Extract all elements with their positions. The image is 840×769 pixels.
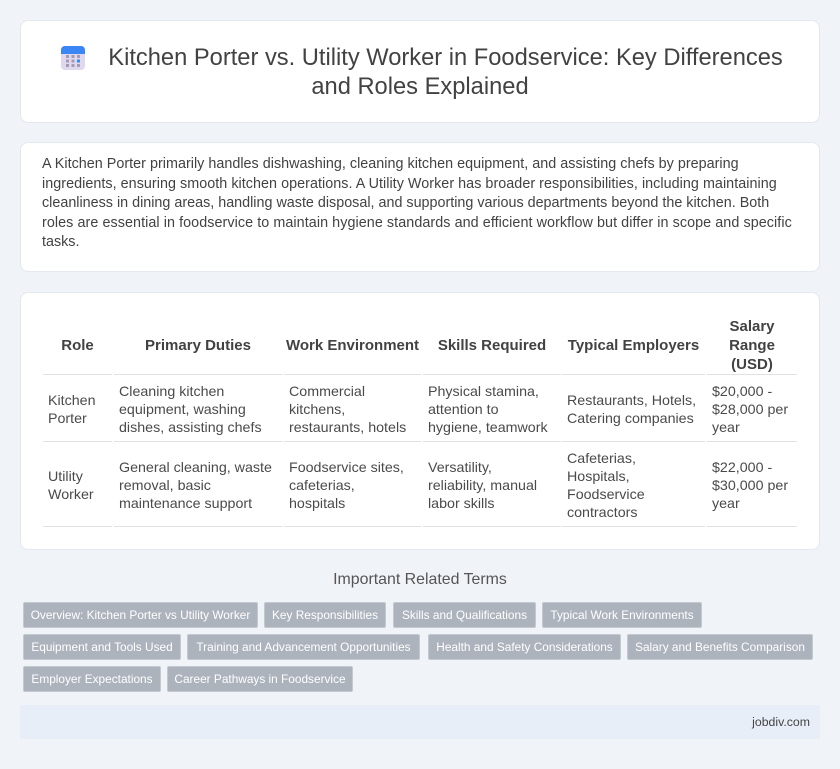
table header row: Range bbox=[729, 337, 775, 354]
table row: Kitchen Porter: Catering companies bbox=[567, 411, 694, 427]
related terms heading: Important Related Terms bbox=[333, 571, 507, 588]
intro text: cleanliness in dining areas, handling waste disposal, and supporting various departments beyond the kitchen. Both bbox=[42, 195, 769, 211]
table row: Kitchen Porter: attention to bbox=[428, 402, 499, 418]
table row: Utility Worker: removal, basic bbox=[119, 478, 211, 494]
table row: Kitchen Porter: $28,000 per bbox=[712, 402, 788, 418]
table row: Kitchen Porter: $20,000 - bbox=[712, 384, 772, 400]
table row: Utility Worker: reliability, manual bbox=[428, 478, 537, 494]
table row: Utility Worker: maintenance support bbox=[119, 496, 252, 512]
table row: Utility Worker: General cleaning, waste bbox=[119, 460, 272, 476]
table row: Utility Worker: hospitals bbox=[289, 496, 345, 512]
table row: Kitchen Porter: Kitchen bbox=[48, 393, 96, 409]
panel: comparison table bbox=[20, 292, 820, 550]
table row: Kitchen Porter bbox=[48, 384, 788, 436]
intro text: A Kitchen Porter primarily handles dishwashing, cleaning kitchen equipment, and assisting chefs by preparing bbox=[42, 156, 739, 172]
table row: Utility Worker bbox=[48, 451, 788, 521]
panel: intro summary bbox=[20, 142, 820, 272]
table header row: Skills Required bbox=[438, 337, 546, 354]
table row: Utility Worker: Worker bbox=[48, 487, 94, 503]
related terms tags: Skills and Qualifications bbox=[402, 608, 527, 622]
table header row bbox=[61, 318, 775, 373]
table header row: Role bbox=[61, 337, 94, 354]
intro text: tasks. bbox=[42, 234, 79, 250]
table row: Kitchen Porter: Restaurants, Hotels, bbox=[567, 393, 696, 409]
related terms tags: Key Responsibilities bbox=[272, 608, 378, 622]
related terms tags: Overview: Kitchen Porter vs Utility Worker bbox=[31, 608, 250, 622]
related terms tags: Employer Expectations bbox=[31, 672, 153, 686]
table row: Utility Worker: Foodservice sites, bbox=[289, 460, 404, 476]
table row: Kitchen Porter: year bbox=[712, 420, 740, 436]
related terms tags: Typical Work Environments bbox=[550, 608, 694, 622]
title: and Roles Explained bbox=[311, 74, 529, 100]
table row: Kitchen Porter: Physical stamina, bbox=[428, 384, 539, 400]
table row: Utility Worker: cafeterias, bbox=[289, 478, 355, 494]
related terms tags bbox=[23, 602, 813, 692]
table row: Utility Worker: Hospitals, bbox=[567, 469, 630, 485]
footer source: jobdiv.com bbox=[752, 715, 810, 729]
title: Kitchen Porter vs. Utility Worker in Foodservice: Key Differences bbox=[108, 45, 783, 71]
title bbox=[108, 45, 783, 100]
table row: Utility Worker: Foodservice bbox=[567, 487, 645, 503]
intro text: ingredients, ensuring smooth kitchen operations. A Utility Worker has broader responsibilities, including maintaining bbox=[42, 176, 777, 192]
table row: Utility Worker: $22,000 - bbox=[712, 460, 772, 476]
table row: Utility Worker: contractors bbox=[567, 505, 638, 521]
table header row: Typical Employers bbox=[568, 337, 699, 354]
table row: Kitchen Porter: equipment, washing bbox=[119, 402, 246, 418]
related terms tags: Career Pathways in Foodservice bbox=[174, 672, 346, 686]
table header row: Primary Duties bbox=[145, 337, 251, 354]
table row: Kitchen Porter: kitchens, bbox=[289, 402, 345, 418]
table row: Utility Worker: labor skills bbox=[428, 496, 495, 512]
bottom rule bbox=[43, 526, 797, 527]
icon: calendar bbox=[61, 46, 85, 70]
related terms tags: Training and Advancement Opportunities bbox=[196, 640, 411, 654]
table row: Utility Worker: $30,000 per bbox=[712, 478, 788, 494]
related terms tags: Equipment and Tools Used bbox=[31, 640, 173, 654]
panel: title card bbox=[20, 20, 820, 123]
table row: Kitchen Porter: Porter bbox=[48, 411, 87, 427]
related terms tags: Salary and Benefits Comparison bbox=[635, 640, 805, 654]
related terms tags: Health and Safety Considerations bbox=[436, 640, 613, 654]
table row: Utility Worker: Utility bbox=[48, 469, 83, 485]
table row: Utility Worker: Cafeterias, bbox=[567, 451, 636, 467]
intro text: roles are essential in foodservice to maintain hygiene standards and efficient workflow but differ in scope and specific bbox=[42, 214, 792, 230]
table row: Kitchen Porter: Cleaning kitchen bbox=[119, 384, 224, 400]
table row: Kitchen Porter: hygiene, teamwork bbox=[428, 420, 548, 436]
table row: Utility Worker: Versatility, bbox=[428, 460, 492, 476]
table header row: Salary bbox=[729, 318, 775, 335]
table header row: (USD) bbox=[731, 356, 773, 373]
row rule bbox=[43, 441, 797, 442]
header rule bbox=[43, 374, 797, 375]
table row: Kitchen Porter: Commercial bbox=[289, 384, 365, 400]
table header row: Work Environment bbox=[286, 337, 419, 354]
intro text bbox=[42, 156, 792, 250]
table row: Kitchen Porter: dishes, assisting chefs bbox=[119, 420, 262, 436]
table row: Utility Worker: year bbox=[712, 496, 740, 512]
table row: Kitchen Porter: restaurants, hotels bbox=[289, 420, 406, 436]
footer bar bbox=[20, 705, 820, 739]
